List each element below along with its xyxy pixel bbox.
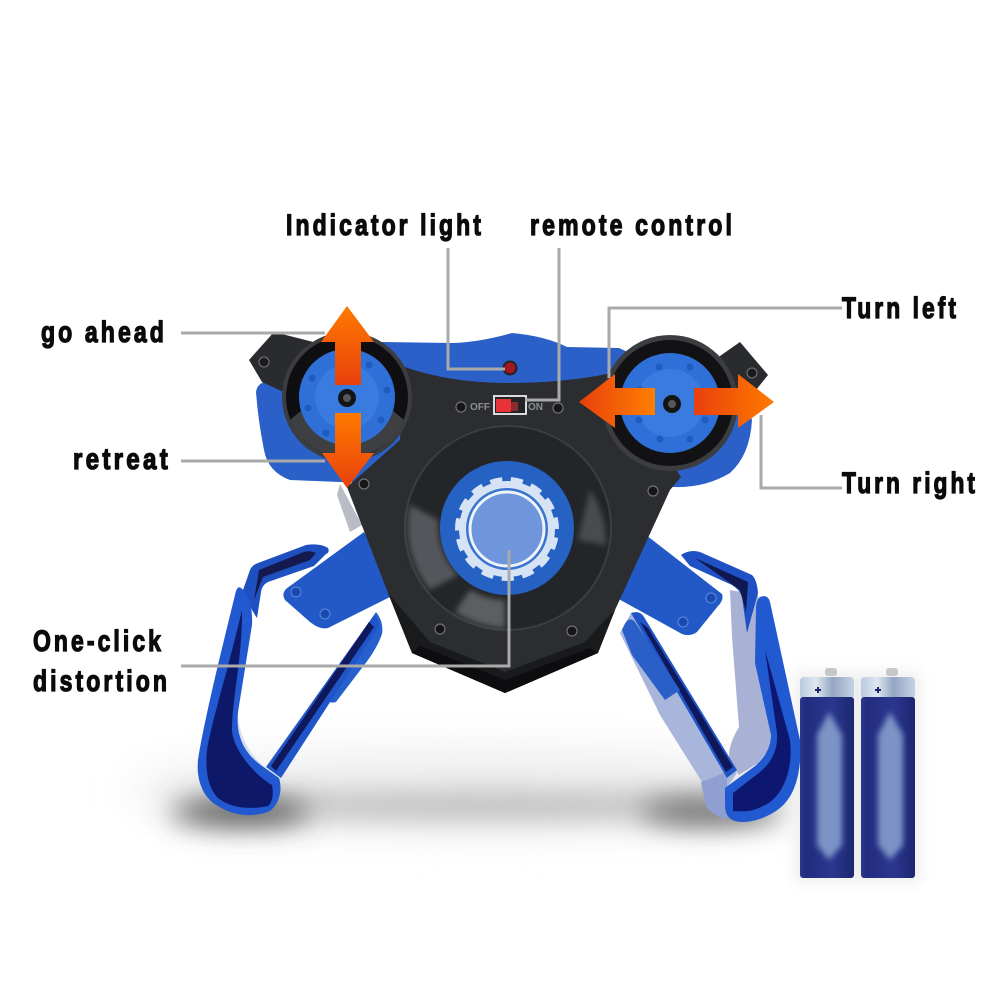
- label: one-click distortion: One-click: [33, 625, 164, 658]
- left grip pad: [283, 532, 398, 628]
- indicator light: [504, 362, 516, 374]
- label: indicator light: Indicator light: [286, 209, 484, 242]
- on off switch: OFF: [470, 402, 490, 413]
- black control panel: [347, 367, 681, 693]
- arrow: left: [579, 374, 655, 428]
- arrow: up: [321, 306, 374, 385]
- left joystick: [282, 332, 412, 462]
- right mounting tab: [700, 342, 768, 400]
- right leg: [620, 551, 800, 822]
- panel screws: [359, 402, 658, 636]
- leader line: one-click distortion: [181, 550, 509, 666]
- label: one-click distortion: [33, 625, 170, 698]
- leader line: remote control: [525, 248, 559, 400]
- label: remote control: remote control: [530, 209, 735, 242]
- leader line: indicator light: [448, 248, 505, 369]
- battery 1: [800, 668, 854, 878]
- label: turn left: Turn left: [842, 292, 959, 325]
- right joystick: [602, 335, 738, 471]
- right grip pad: [615, 535, 722, 635]
- label: go ahead: go ahead: [41, 316, 167, 349]
- leader line: turn left: [609, 308, 842, 378]
- label: one-click distortion: distortion: [33, 665, 170, 698]
- arrow: right: [694, 374, 774, 428]
- leader line: go ahead: [181, 332, 325, 334]
- leader line: retreat: [181, 460, 325, 462]
- on off switch: ON: [528, 402, 543, 413]
- center button: [405, 426, 611, 630]
- leader line: turn right: [761, 415, 842, 488]
- on off switch: [470, 395, 543, 415]
- battery 2: [861, 668, 915, 878]
- ground shadow: [130, 672, 920, 882]
- label: retreat: retreat: [73, 443, 171, 476]
- blue housing: [256, 333, 752, 532]
- left mounting tab: [249, 332, 325, 395]
- left leg: [198, 544, 382, 815]
- arrow: down: [322, 413, 374, 488]
